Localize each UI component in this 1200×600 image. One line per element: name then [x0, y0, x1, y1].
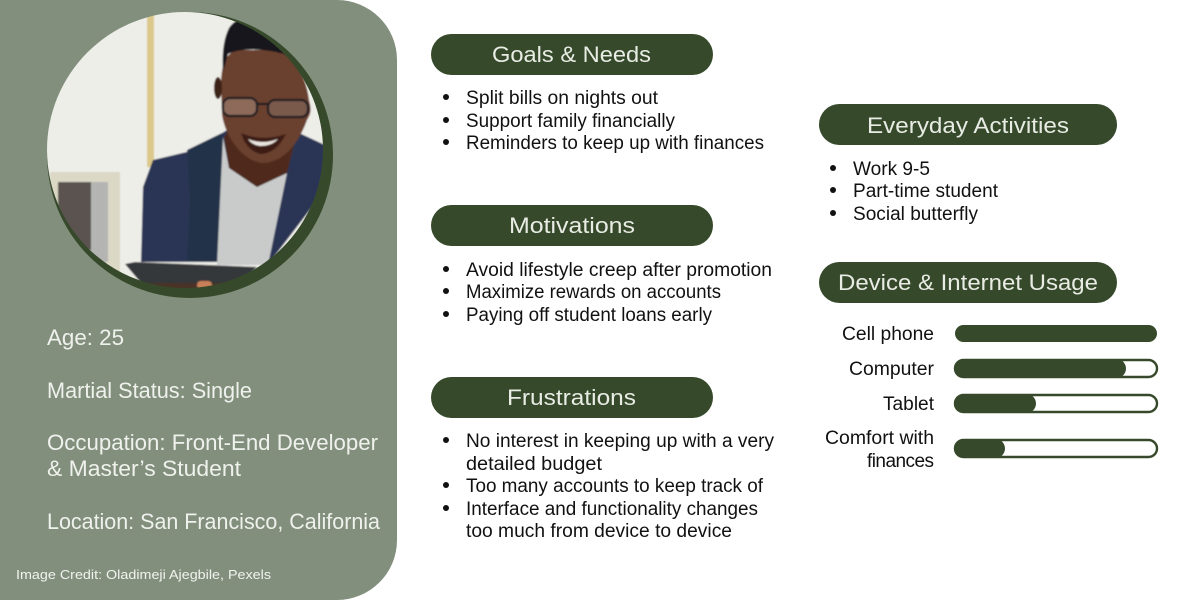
bar: comfort with finances	[825, 428, 1157, 472]
panel: everyday activities	[819, 104, 1117, 225]
bar: cell phone: Cell phone	[842, 324, 934, 345]
list: frustrations: Interface and functionality changes	[466, 499, 758, 520]
text: occupation: Occupation: Front-End Developer	[47, 430, 378, 455]
heading: goals and needs: Goals & Needs	[492, 42, 651, 67]
panel: device and internet usage	[819, 262, 1157, 472]
list: everyday activities: Social butterfly	[853, 204, 978, 225]
bar: comfort with finances: Comfort with	[825, 428, 934, 449]
list: frustrations: No interest in keeping up with a very	[466, 431, 774, 452]
bar: computer: Computer	[849, 359, 935, 380]
list: everyday activities	[830, 159, 999, 225]
heading: frustrations: Frustrations	[507, 385, 636, 410]
list: everyday activities: Part-time student	[853, 181, 999, 202]
list: goals and needs: Reminders to keep up with finances	[466, 133, 764, 154]
bar: tablet	[883, 394, 1157, 415]
list: goals and needs: Split bills on nights out	[466, 88, 659, 109]
text: marital status: Martial Status: Single	[47, 378, 252, 403]
list: motivations: Maximize rewards on accounts	[466, 282, 721, 303]
panel: profile sidebar	[0, 0, 397, 600]
list: frustrations: detailed budget	[466, 454, 603, 475]
panel: goals and needs	[431, 34, 764, 154]
heading: everyday activities: Everyday Activities	[867, 113, 1069, 138]
heading: motivations	[431, 205, 713, 246]
text: occupation	[47, 430, 378, 481]
panel: motivations	[431, 205, 772, 326]
text: image credit: Image Credit: Oladimeji Ajegbile, Pexels	[16, 567, 272, 582]
text: occupation: & Master’s Student	[47, 456, 241, 481]
bar: cell phone	[842, 324, 1157, 345]
list: motivations: Avoid lifestyle creep after promotion	[466, 260, 772, 281]
list: frustrations: Too many accounts to keep track of	[466, 476, 764, 497]
bar: computer	[849, 359, 1157, 380]
list: motivations	[443, 260, 772, 326]
bar: tablet: Tablet	[883, 394, 935, 415]
heading: device and internet usage: Device & Internet Usage	[838, 270, 1098, 295]
list: motivations: Paying off student loans early	[466, 305, 712, 326]
list: frustrations	[443, 431, 774, 542]
heading: motivations: Motivations	[509, 213, 635, 238]
list: goals and needs	[443, 88, 764, 154]
list: goals and needs: Support family financially	[466, 111, 675, 132]
text: age: Age: 25	[47, 325, 124, 350]
text: location: Location: San Francisco, California	[47, 509, 381, 534]
portrait photo	[45, 10, 333, 298]
list: everyday activities: Work 9-5	[853, 159, 930, 180]
heading: everyday activities	[819, 104, 1117, 145]
heading: goals and needs	[431, 34, 713, 75]
panel: frustrations	[431, 377, 774, 542]
heading: frustrations	[431, 377, 713, 418]
list: frustrations: too much from device to device	[466, 521, 732, 542]
bar: comfort with finances: finances	[867, 451, 934, 472]
heading: device and internet usage	[819, 262, 1117, 303]
